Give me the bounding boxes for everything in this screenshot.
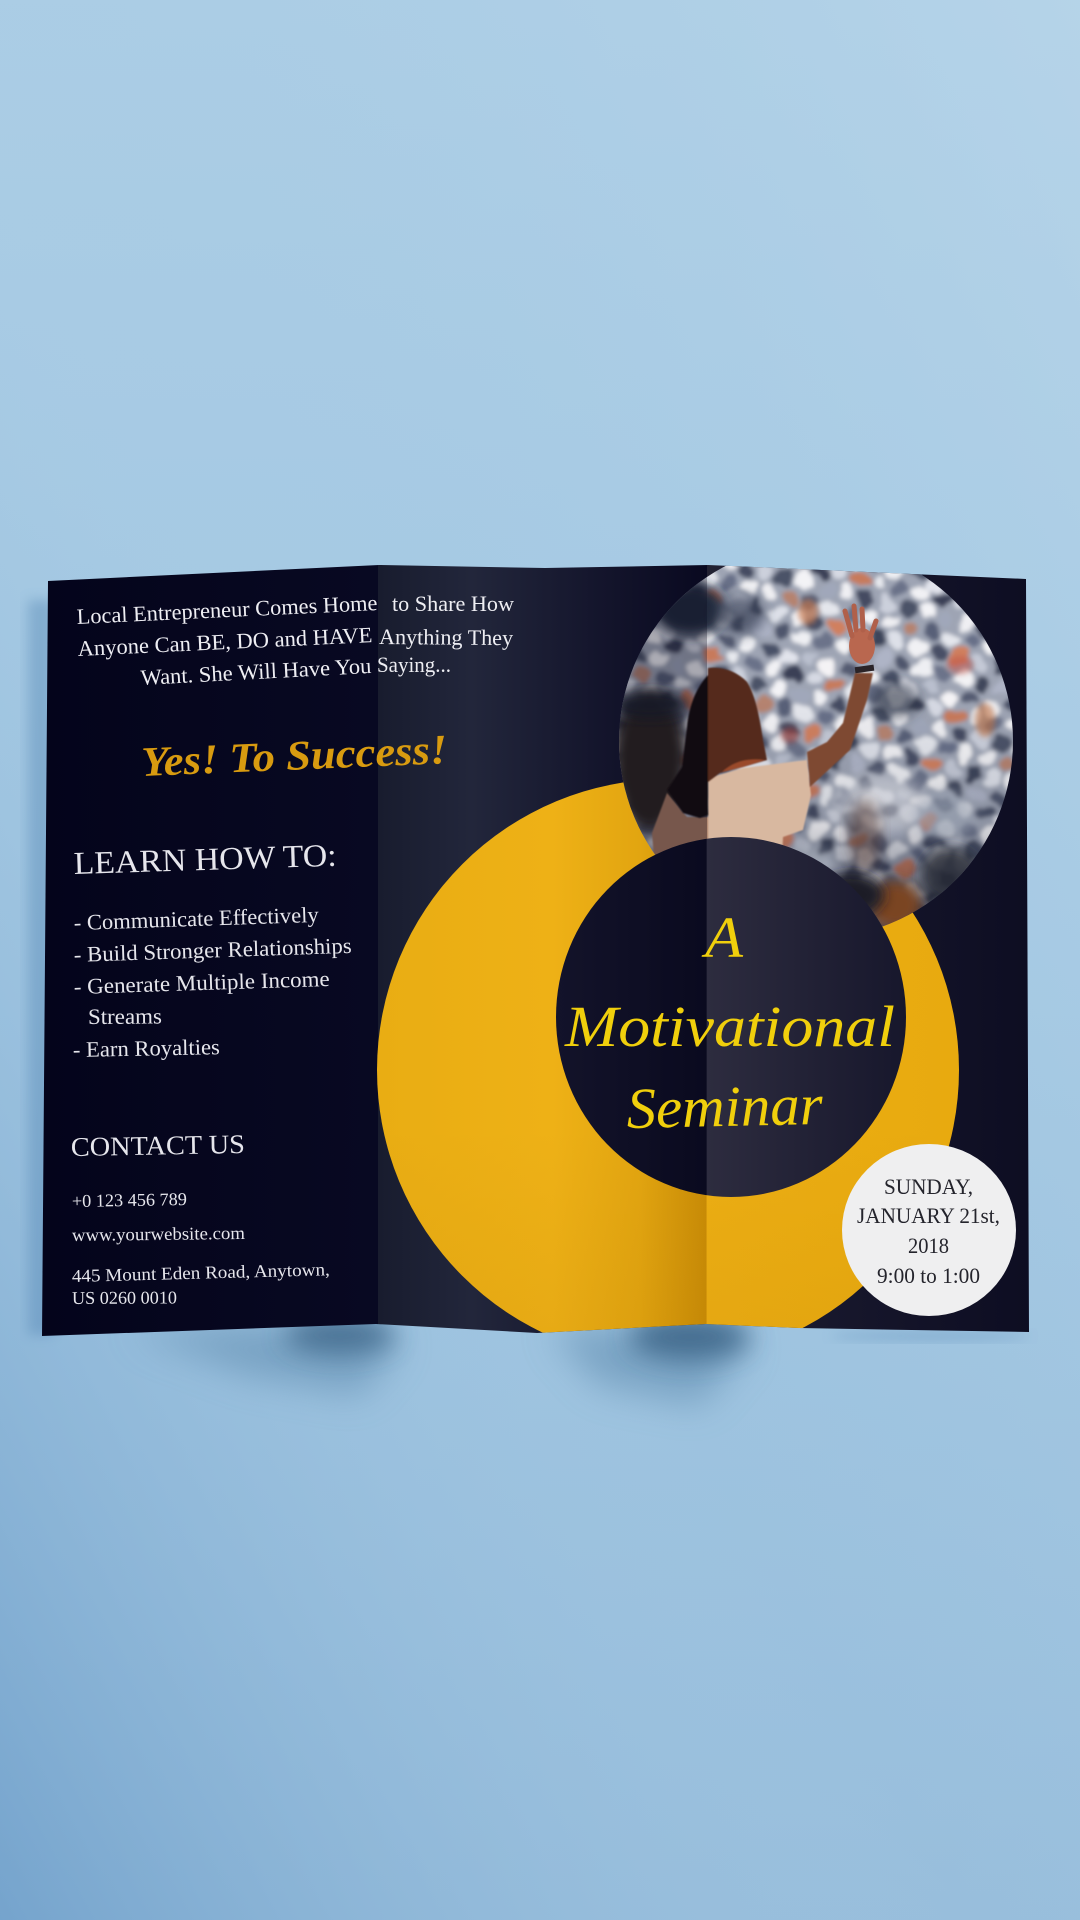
contact details: US 0260 0010 xyxy=(72,1287,177,1308)
list of skills xyxy=(73,902,352,1062)
date text: 9:00 to 1:00 xyxy=(877,1263,980,1288)
intro text xyxy=(76,590,514,690)
intro text: Anything They xyxy=(379,624,513,650)
wristband xyxy=(855,665,874,673)
intro text: to Share How xyxy=(392,591,514,616)
title: A Motivational Seminar: Motivational xyxy=(564,994,895,1059)
list of skills: - Communicate Effectively xyxy=(73,902,319,935)
list of skills: - Build Stronger Relationships xyxy=(73,933,352,967)
contact details: +0 123 456 789 xyxy=(72,1189,187,1211)
list of skills: - Earn Royalties xyxy=(73,1034,220,1062)
shading left of fold xyxy=(619,577,707,855)
woman's dress xyxy=(652,760,812,854)
contact details xyxy=(72,1189,330,1308)
heading: contact us: CONTACT US xyxy=(71,1129,245,1162)
date text: 2018 xyxy=(908,1233,949,1258)
warm and dark crowd patches xyxy=(610,584,1020,950)
list of skills: - Generate Multiple Income xyxy=(73,966,330,999)
contact details: www.yourwebsite.com xyxy=(72,1223,245,1245)
gold circle xyxy=(377,779,959,1361)
title: A Motivational Seminar: Seminar xyxy=(626,1072,824,1141)
intro text: Local Entrepreneur Comes Home xyxy=(76,590,378,629)
title: A Motivational Seminar xyxy=(564,905,895,1141)
photo circle: crowd with raised hand xyxy=(619,566,1013,926)
intro text: Anyone Can BE, DO and HAVE xyxy=(77,622,373,661)
folded brochure xyxy=(42,565,1029,1336)
date text: SUNDAY, xyxy=(884,1174,973,1199)
intro text: Want. She Will Have You xyxy=(140,653,372,690)
tagline: Yes! To Success!: Yes! To Success! xyxy=(140,727,448,786)
date text: JANUARY 21st, xyxy=(857,1203,1000,1228)
title: A Motivational Seminar: A xyxy=(701,905,744,970)
brochure cast shadows xyxy=(28,600,1030,1405)
dark title circle xyxy=(556,837,906,1197)
contact details: 445 Mount Eden Road, Anytown, xyxy=(72,1259,330,1286)
intro text: Saying... xyxy=(377,652,451,677)
date text xyxy=(857,1174,1000,1288)
woman's hair xyxy=(667,668,767,818)
list of skills: Streams xyxy=(88,1003,162,1029)
date circle xyxy=(842,1144,1016,1316)
heading: learn how to: LEARN HOW TO: xyxy=(73,837,337,881)
woman's arm xyxy=(807,673,873,787)
raised hand xyxy=(845,606,876,664)
